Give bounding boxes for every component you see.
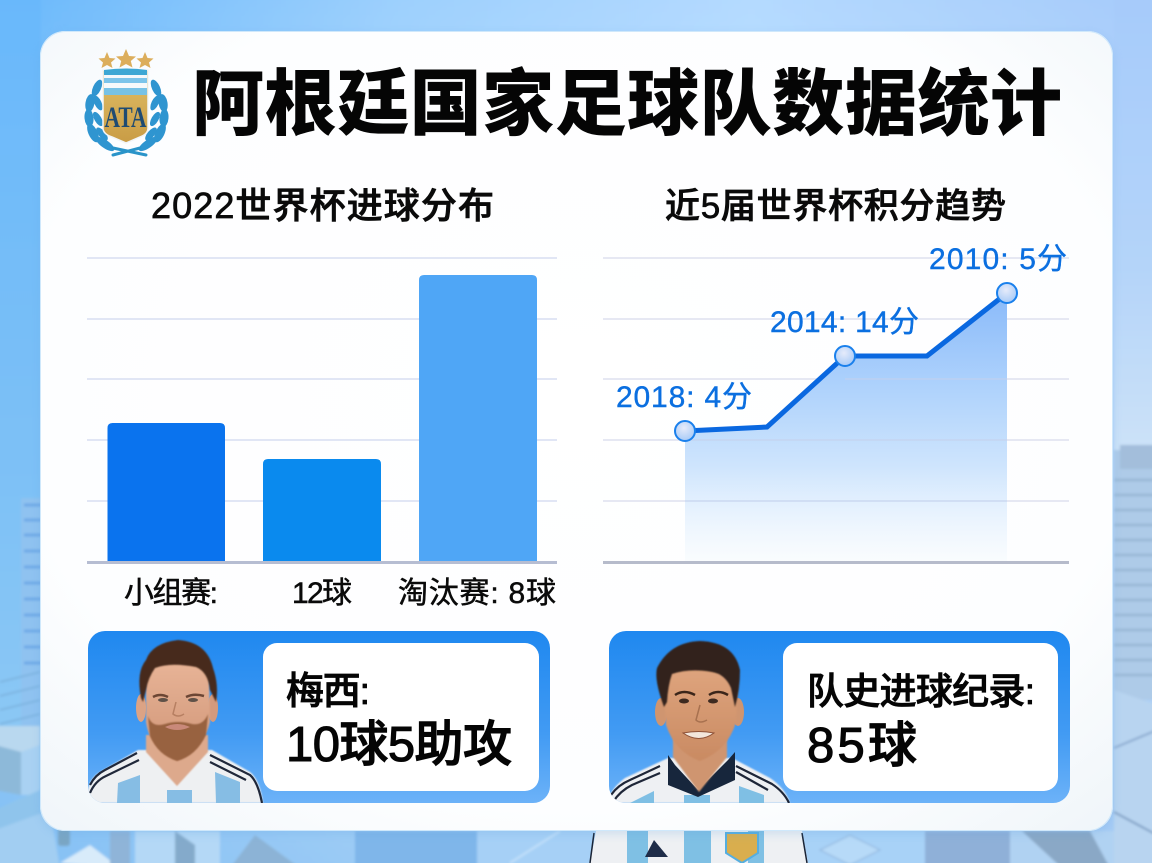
card: team scoring record <box>609 631 1070 803</box>
marker 2010 <box>997 283 1017 303</box>
label: group stage: 小组赛: <box>124 577 218 610</box>
crest shield: ATA <box>104 101 147 134</box>
heading: points trend: 近5届世界杯积分趋势 <box>665 187 1006 226</box>
crest wreath <box>84 78 169 155</box>
bar: group stage <box>108 423 225 562</box>
stats box <box>783 643 1058 791</box>
trend line <box>685 293 1007 431</box>
portrait: Messi <box>88 640 263 803</box>
crest stars <box>98 49 154 68</box>
bar: middle value <box>263 459 381 562</box>
baseline <box>603 561 1069 564</box>
value: 85 goals: 85球 <box>807 719 917 773</box>
label: Messi: 梅西: <box>286 671 370 713</box>
heading: goal distribution: 2022世界杯进球分布 <box>151 185 494 226</box>
label: middle value: 12球 <box>292 577 352 610</box>
stats box <box>263 643 539 791</box>
label 2014: 2014: 14分 <box>770 306 919 339</box>
bar: knockout stage <box>419 275 537 562</box>
portrait: player <box>610 641 790 803</box>
marker 2014 <box>835 346 855 366</box>
label 2018: 2018: 4分 <box>616 381 752 414</box>
label: team record: 队史进球纪录: <box>807 671 1035 712</box>
marker 2018 <box>675 421 695 441</box>
card: Messi stats <box>88 631 550 803</box>
label 2010: 2010: 5分 <box>929 243 1067 276</box>
chart area fill <box>685 293 1007 562</box>
title: 阿根廷国家足球队数据统计 <box>192 65 1062 145</box>
baseline <box>87 561 557 564</box>
value: goals and assists: 10球5助攻 <box>286 718 512 772</box>
label: knockout stage: 淘汰赛: 8球 <box>398 577 556 610</box>
line chart: world cup points trend <box>603 243 1069 564</box>
player torso below panel <box>590 831 808 863</box>
bar chart: 2022 goals <box>87 258 557 610</box>
icon: Argentina football association crest <box>84 49 169 155</box>
